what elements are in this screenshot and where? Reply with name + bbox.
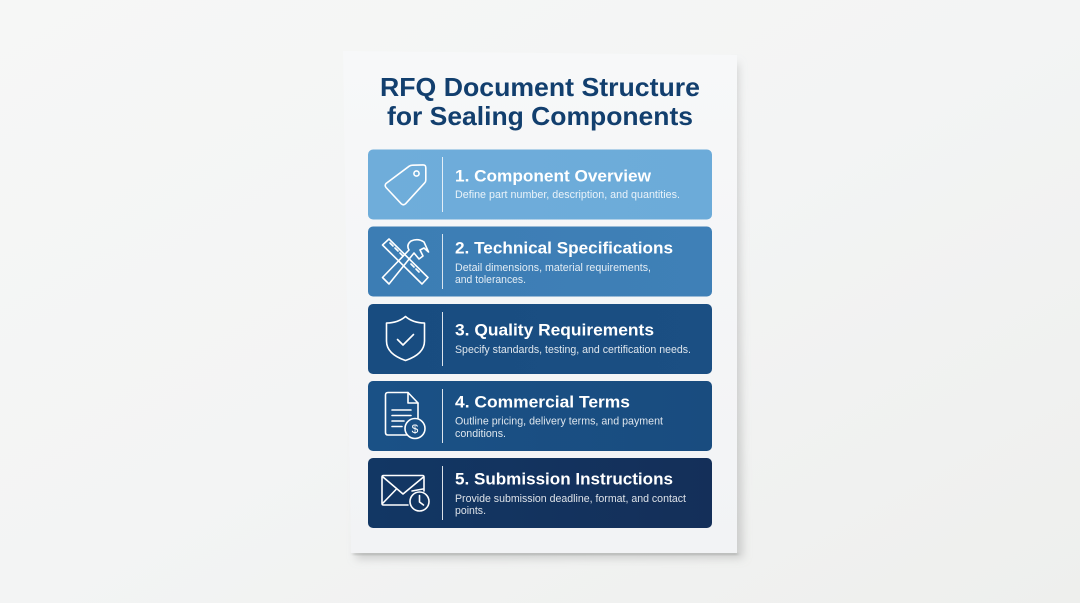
icon: price tag xyxy=(385,165,426,205)
divider xyxy=(442,389,444,443)
description: Detail dimensions, material requirements, xyxy=(455,262,651,274)
panel: submission instructions xyxy=(368,458,712,528)
heading: 2. Technical Specifications xyxy=(455,238,673,258)
description xyxy=(455,416,664,440)
title: RFQ Document Structure xyxy=(380,72,700,102)
heading: 4. Commercial Terms xyxy=(455,392,630,412)
description: points. xyxy=(455,505,486,517)
title: for Sealing Components xyxy=(387,101,693,131)
heading: 3. Quality Requirements xyxy=(455,321,654,340)
panel: commercial terms xyxy=(368,381,712,451)
icon: envelope with clock xyxy=(382,476,429,511)
panel: technical specifications xyxy=(368,226,712,296)
icon: shield with check xyxy=(386,316,424,360)
paper sheet xyxy=(343,51,737,553)
panel: component overview xyxy=(368,150,712,220)
divider xyxy=(442,234,444,289)
title xyxy=(380,72,700,131)
icon: document with dollar: $ xyxy=(412,422,419,436)
divider xyxy=(442,312,444,366)
description: Define part number, description, and quantities. xyxy=(455,189,680,201)
description xyxy=(455,262,651,286)
description: conditions. xyxy=(455,428,506,440)
icon: document with dollar xyxy=(386,392,425,438)
icon: crossed ruler and wrench xyxy=(382,239,428,284)
description: Provide submission deadline, format, and contact xyxy=(455,493,687,505)
description xyxy=(455,493,687,517)
heading: 5. Submission Instructions xyxy=(455,470,673,489)
divider xyxy=(442,157,444,212)
description: Specify standards, testing, and certification needs. xyxy=(455,344,691,356)
divider xyxy=(442,466,444,520)
paper shadow xyxy=(352,62,743,559)
panel: quality requirements xyxy=(368,304,712,374)
description: Outline pricing, delivery terms, and payment xyxy=(455,416,664,428)
heading: 1. Component Overview xyxy=(455,166,652,186)
description: and tolerances. xyxy=(455,274,526,286)
